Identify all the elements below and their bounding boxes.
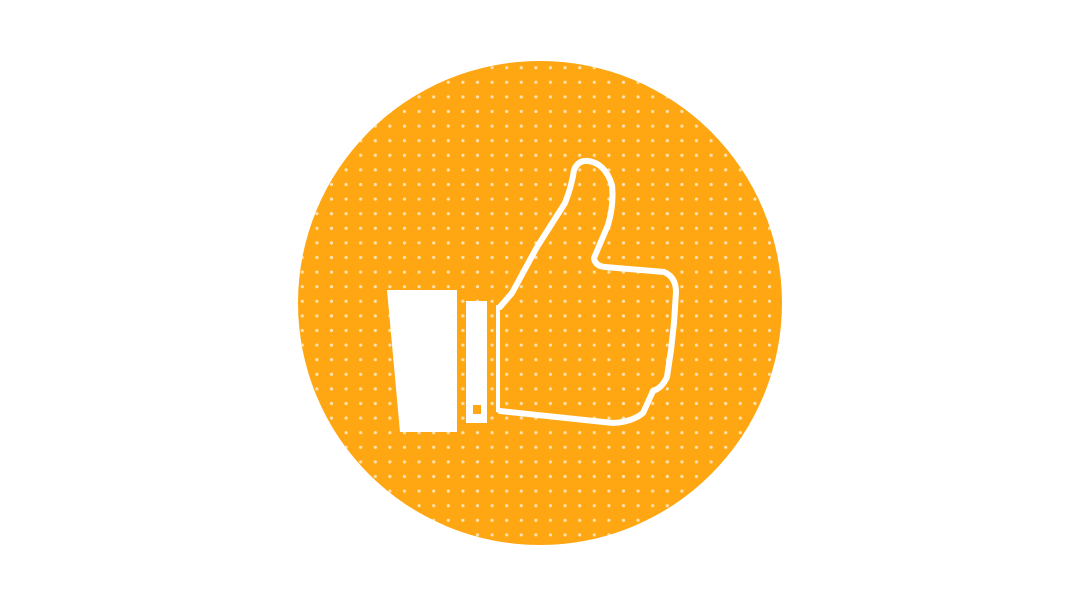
icon: thumbs up badge: [298, 61, 782, 545]
thumbs up hand: [387, 161, 676, 432]
cuff: [466, 301, 487, 423]
orange circle background: [290, 55, 790, 555]
sleeve: [387, 290, 457, 432]
hand outline: [500, 161, 676, 423]
